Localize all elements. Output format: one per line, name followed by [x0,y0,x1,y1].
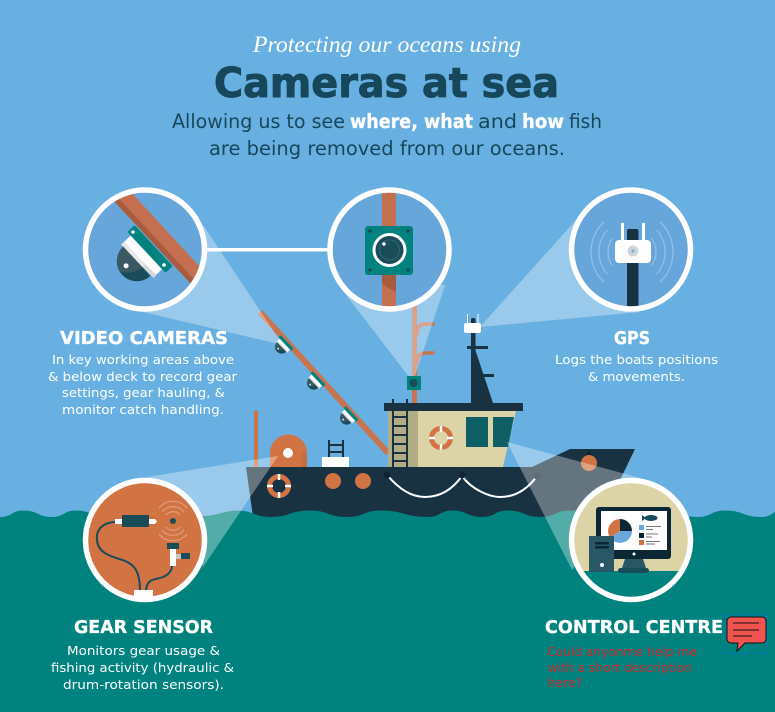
orange mast [412,300,433,403]
text: GPS: GPS [614,329,650,349]
circle: GPS [571,190,691,314]
red comment text [547,644,697,690]
kicker: Protecting our oceans using [252,32,521,57]
hull lifebuoy [267,474,291,498]
cabin ladder [393,399,407,467]
red comment text: with a short description [548,660,692,675]
dome camera [116,226,172,282]
hull [246,449,635,530]
fenders [325,450,597,489]
red comment text: here? [548,675,582,690]
text: GPS [555,329,718,384]
boom [260,312,388,453]
subtitle [172,110,602,160]
text: video cameras: settings, gear hauling, & [62,385,225,400]
text: control centre [545,618,723,690]
GPS unit on boat [464,314,481,333]
connector line [205,248,329,252]
main title: Cameras at sea [214,59,559,107]
text: GPS: & movements. [588,369,685,384]
net curves [384,472,540,497]
subtitle: Allowing us to see [172,110,345,133]
light beams [143,210,640,570]
legend [639,525,661,545]
pie chart [608,519,632,543]
stern post [254,411,258,467]
cabin roof [384,403,523,411]
text: video cameras [48,329,238,417]
signal rings [159,501,187,541]
mast camera [407,376,421,403]
subtitle: and [478,110,517,133]
text: video cameras: In key working areas above [52,352,234,367]
text: GPS: Logs the boats positions [555,352,718,367]
text: video cameras: VIDEO CAMERAS [60,329,228,349]
cabin windows [466,417,514,447]
red comment text: Could anyonme help me [547,644,697,659]
title block [172,32,602,160]
boom segment [114,194,200,284]
sensor body [115,515,157,527]
text: control centre: CONTROL CENTRE [545,618,723,638]
icon: comment bubble [724,614,768,654]
subtitle: where, what [350,110,473,133]
text: video cameras: & below deck to record gear [48,369,238,384]
wheelhouse tower [467,318,494,404]
circle: video camera on boom [85,184,212,310]
cabin [388,399,516,467]
drum [270,434,307,467]
text: gear sensor [51,618,234,692]
subtitle: fish [569,110,602,133]
fishing boat [246,300,635,530]
text: gear sensor: drum-rotation sensors). [63,677,224,692]
circle: control centre [565,480,697,606]
subtitle: how [522,110,564,133]
computer tower [589,536,614,572]
circle: gear sensor [85,480,205,604]
deck ladder and box [322,440,349,467]
circle: mast camera [330,185,450,315]
monitor [596,507,671,573]
boom cameras [271,335,359,429]
text: gear sensor: fishing activity (hydraulic & [51,660,234,675]
text: video cameras: monitor catch handling. [62,402,224,417]
junction box [134,590,153,597]
mast segment [382,192,396,306]
drum sensor [167,543,190,566]
GPS unit [615,223,651,263]
pole [627,229,638,314]
camera plate [365,226,413,275]
text: gear sensor: GEAR SENSOR [74,618,214,638]
text: gear sensor: Monitors gear usage & [67,643,220,658]
cabin lifebuoy [429,426,453,450]
signal arcs [591,222,673,282]
sea [0,510,775,712]
subtitle: are being removed from our oceans. [209,137,565,160]
fish icon [642,515,658,521]
cables [97,522,172,592]
